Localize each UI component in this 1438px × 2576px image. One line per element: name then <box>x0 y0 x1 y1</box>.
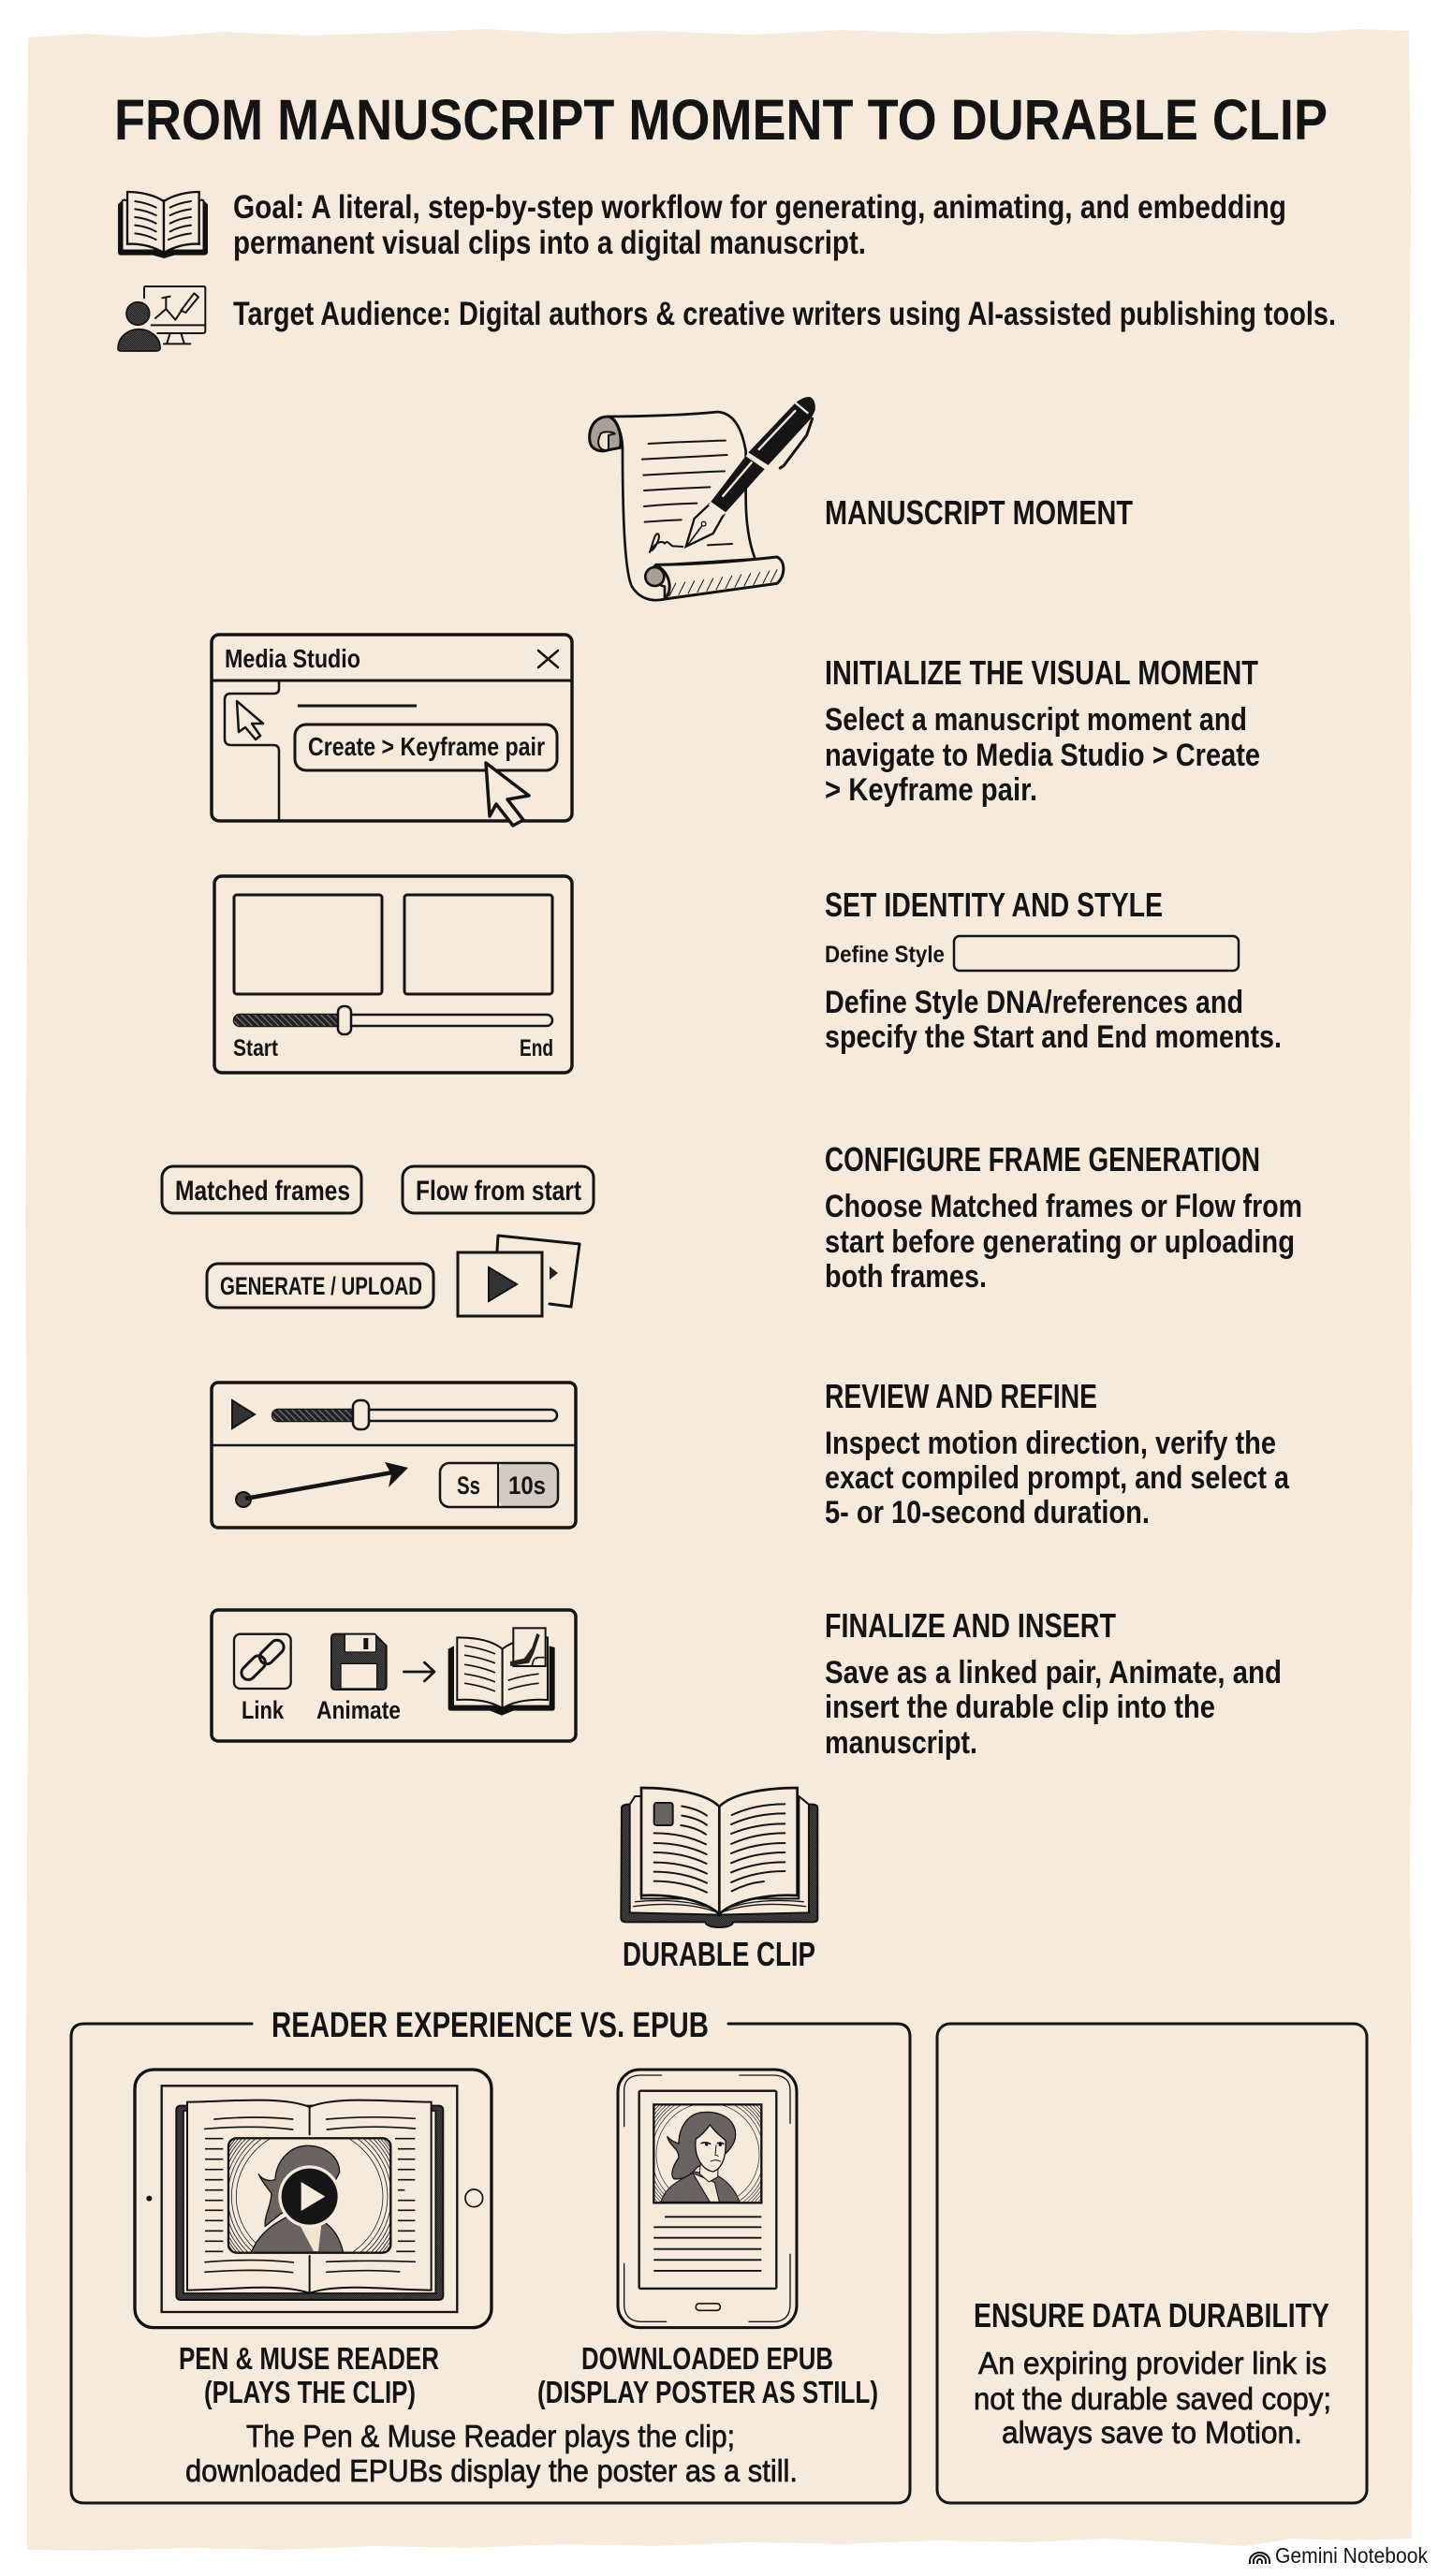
panel: ensure data durability: ENSURE DATA DURABILITY <box>974 2296 1329 2334</box>
button <box>295 724 557 770</box>
UI mock: frame generation options <box>162 1166 594 1316</box>
UI mock: finalize panel: Link <box>242 1696 285 1724</box>
device captions: (DISPLAY POSTER AS STILL) <box>537 2375 878 2409</box>
device captions: DOWNLOADED EPUB <box>581 2341 833 2376</box>
panel: ensure data durability: An expiring provider link is <box>978 2346 1327 2380</box>
panel heading: READER EXPERIENCE VS. EPUB <box>271 2006 709 2045</box>
step 3 text: Choose Matched frames or Flow from <box>825 1189 1302 1224</box>
UI mock: frame generation options: GENERATE / UPLOAD <box>220 1272 422 1300</box>
step 2 text: SET IDENTITY AND STYLE <box>825 886 1163 924</box>
label: durable clip: DURABLE CLIP <box>623 1935 815 1973</box>
UI mock: start and end frames: End <box>520 1035 553 1061</box>
UI mock: media studio window: Create > Keyframe pair <box>308 732 545 761</box>
step 1 text: navigate to Media Studio > Create <box>825 738 1260 773</box>
watermark: Gemini Notebook: Gemini Notebook <box>1275 2543 1428 2568</box>
step 5 text: insert the durable clip into the <box>825 1690 1215 1725</box>
step 4 text: Inspect motion direction, verify the <box>825 1426 1276 1461</box>
step 3 text: both frames. <box>825 1259 987 1295</box>
front frame with play icon <box>458 1252 542 1316</box>
sidebar tab <box>225 681 279 821</box>
step 1 text: INITIALIZE THE VISUAL MOMENT <box>825 653 1258 692</box>
large cursor <box>486 763 529 826</box>
UI mock: start and end frames <box>214 876 572 1073</box>
reader experience note: The Pen & Muse Reader plays the clip; <box>246 2419 735 2453</box>
panel: ensure data durability: always save to Motion. <box>1002 2415 1302 2450</box>
step 1 text: Select a manuscript moment and <box>825 702 1247 738</box>
timeline slider <box>234 1015 552 1026</box>
e-reader illustration <box>618 2070 797 2328</box>
step 5 text: FINALIZE AND INSERT <box>825 1606 1116 1645</box>
UI mock: review panel: Ss <box>457 1471 480 1500</box>
step 5 text <box>825 1606 1282 1761</box>
UI mock: frame generation options: Flow from start <box>416 1176 581 1207</box>
step 5 text: manuscript. <box>825 1725 977 1761</box>
step 2 text: Define Style DNA/references and <box>825 985 1243 1020</box>
step 4 text: exact compiled prompt, and select a <box>825 1460 1290 1496</box>
icon: durable clip book <box>621 1788 817 1927</box>
step 4 text: REVIEW AND REFINE <box>825 1377 1097 1415</box>
step 5 text: Save as a linked pair, Animate, and <box>825 1655 1282 1690</box>
playback controls <box>232 1400 255 1428</box>
goal text: permanent visual clips into a digital manuscript. <box>233 225 866 261</box>
step 3 text: CONFIGURE FRAME GENERATION <box>825 1140 1260 1178</box>
step 4 text <box>825 1377 1290 1530</box>
step 4 text: 5- or 10-second duration. <box>825 1495 1150 1530</box>
icon: scroll with fountain pen <box>590 397 815 600</box>
motion arrow <box>236 1492 251 1507</box>
panel: ensure data durability <box>937 2024 1367 2503</box>
label: manuscript moment: MANUSCRIPT MOMENT <box>825 493 1133 532</box>
step 2 text <box>825 886 1282 1055</box>
UI mock: media studio window <box>212 635 572 826</box>
panel: reader experience vs EPUB <box>71 2006 910 2503</box>
UI mock: review panel <box>212 1383 576 1528</box>
arrow <box>404 1662 434 1681</box>
video poster with play button <box>227 2137 391 2254</box>
reader experience note: downloaded EPUBs display the poster as a still. <box>185 2453 798 2488</box>
poster portrait <box>653 2103 762 2203</box>
step 3 text: start before generating or uploading <box>825 1224 1295 1260</box>
goal text: Goal: A literal, step-by-step workflow for generating, animating, and embedding <box>233 189 1286 226</box>
icon: book with inserted clip <box>448 1628 555 1716</box>
tablet illustration <box>135 2070 492 2328</box>
device captions: (PLAYS THE CLIP) <box>204 2375 416 2409</box>
device captions: PEN & MUSE READER <box>179 2341 439 2376</box>
icon: link <box>234 1634 291 1689</box>
reader experience note <box>185 2419 798 2488</box>
step 3 text <box>825 1140 1302 1295</box>
back frame <box>497 1236 580 1307</box>
UI mock: start and end frames: Start <box>233 1035 279 1061</box>
step 1 text <box>825 653 1260 808</box>
define style field: Define Style <box>825 942 945 968</box>
UI mock: review panel: 10s <box>508 1471 546 1500</box>
device captions <box>179 2341 878 2409</box>
close icon <box>538 651 558 667</box>
duration toggle <box>498 1463 558 1507</box>
UI mock: frame generation options: Matched frames <box>175 1176 350 1207</box>
panel: ensure data durability: not the durable saved copy; <box>974 2381 1331 2416</box>
window title: Media Studio <box>225 644 360 673</box>
goal text <box>233 189 1286 261</box>
icon: open book (goal) <box>118 192 208 258</box>
small cursor <box>237 701 263 739</box>
step 1 text: > Keyframe pair. <box>825 772 1037 808</box>
UI mock: finalize panel <box>212 1610 576 1741</box>
icon: floppy disk <box>331 1634 387 1690</box>
UI mock: finalize panel: Animate <box>316 1696 401 1724</box>
icon: person and monitor (audience) <box>118 286 205 351</box>
step 2 text: specify the Start and End moments. <box>825 1019 1282 1055</box>
